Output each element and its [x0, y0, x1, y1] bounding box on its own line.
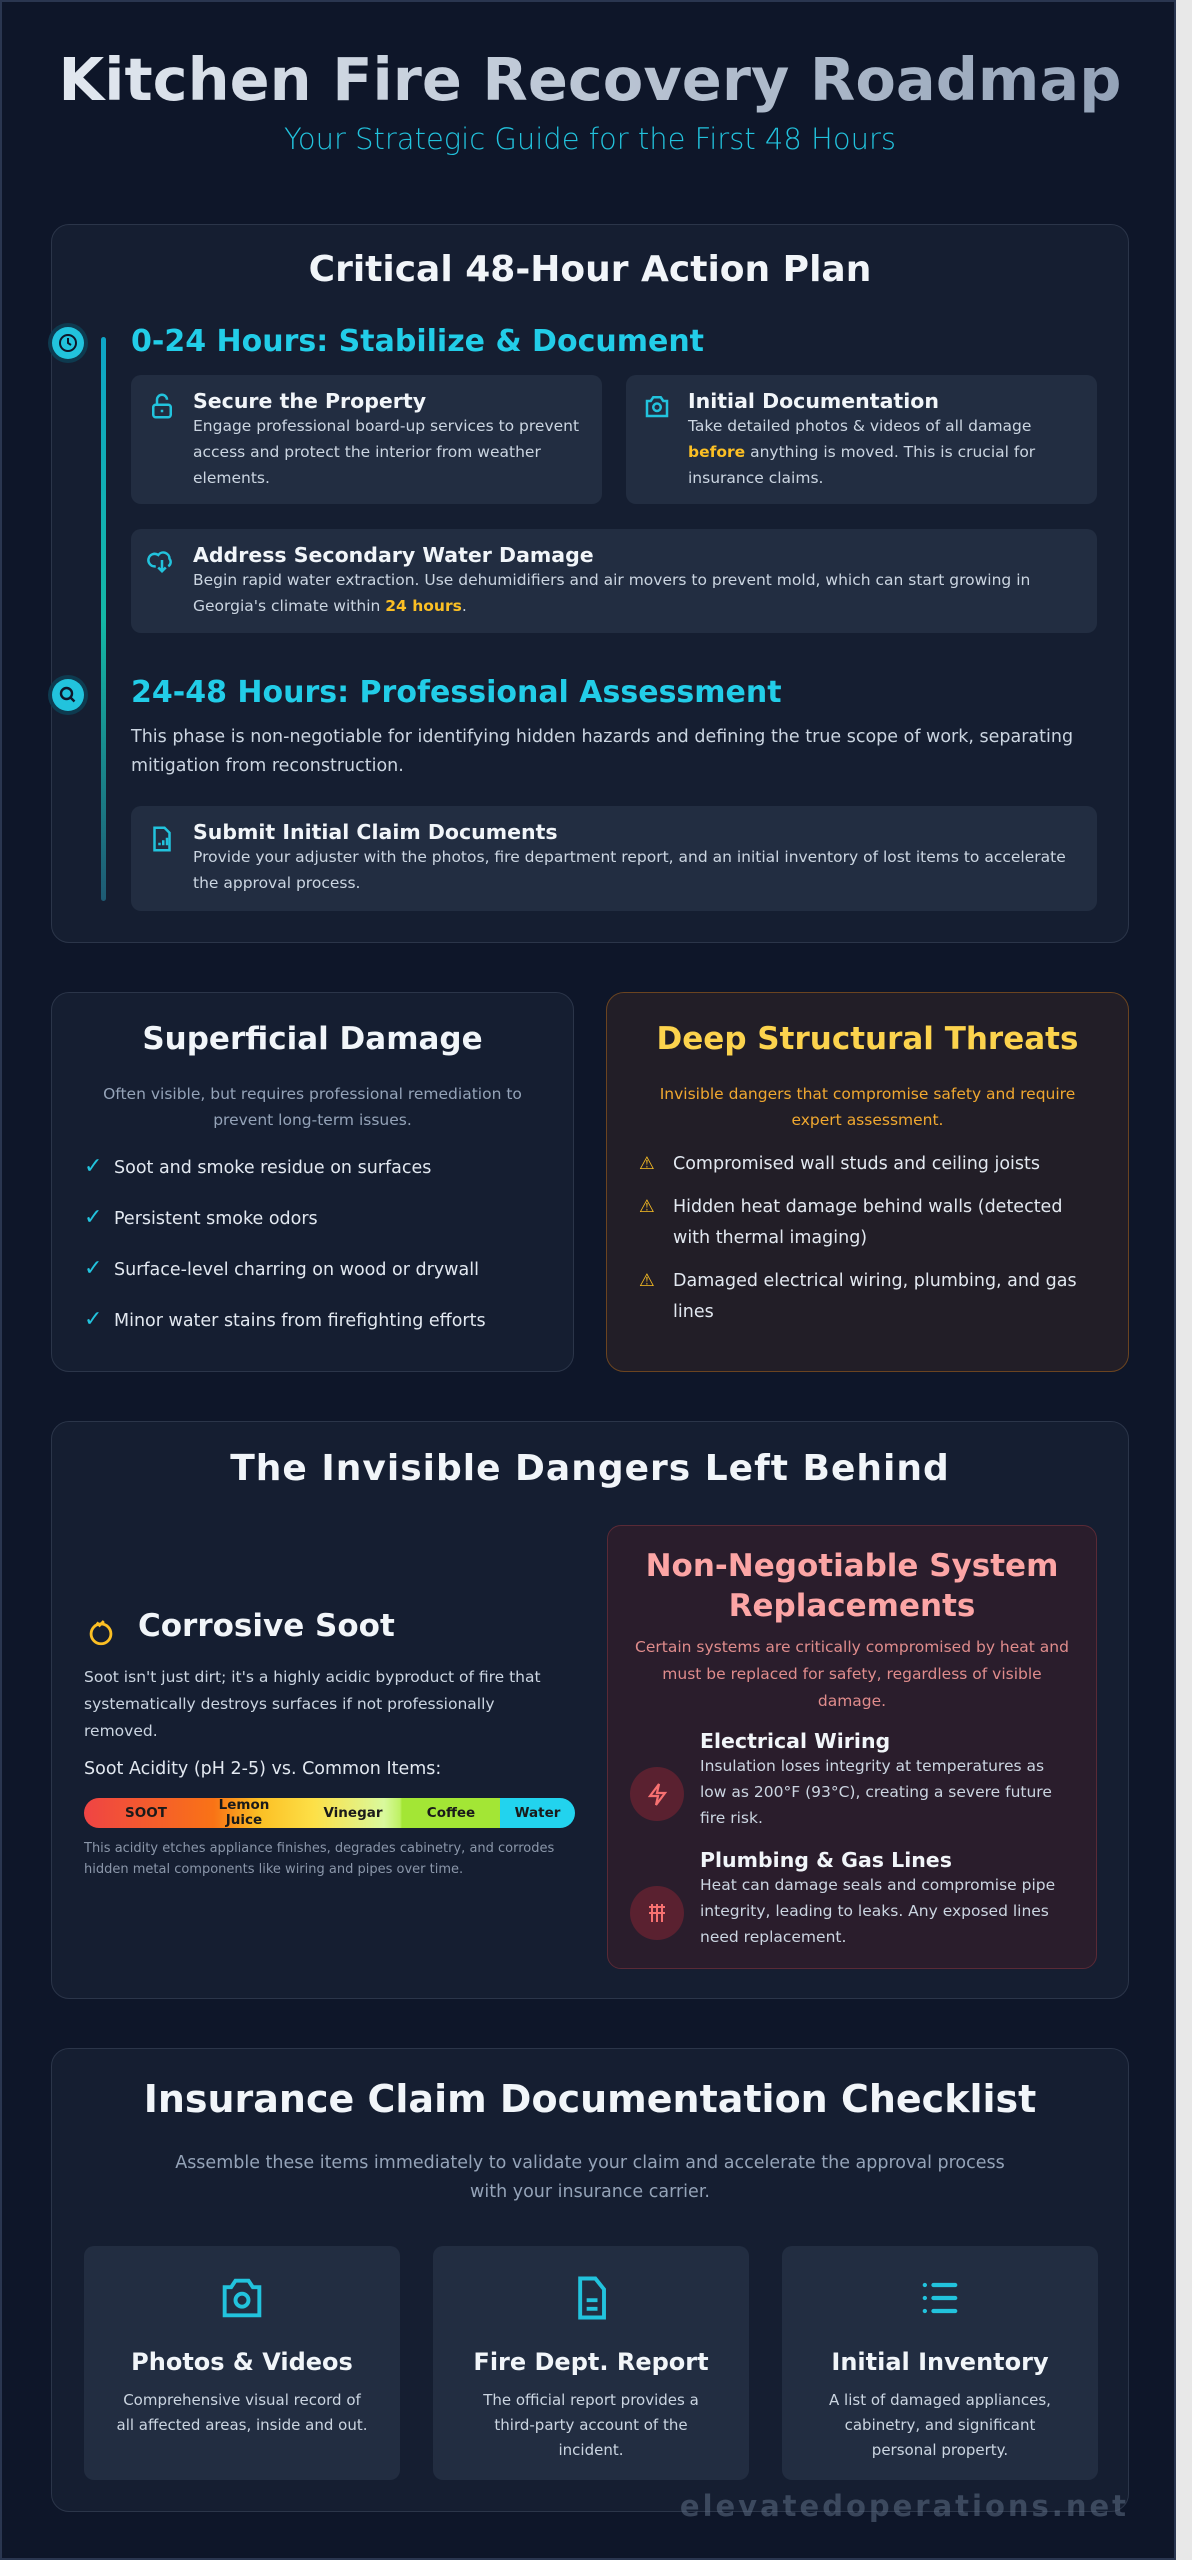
pH scale bar: SOOT	[125, 1805, 167, 1821]
card: fire report: The official report provides a third-party account of the incident.	[483, 2391, 699, 2459]
card: water damage	[131, 529, 1097, 633]
checklist	[84, 1154, 486, 1332]
icon: camera	[222, 2278, 262, 2318]
card: photos	[84, 2246, 400, 2480]
checklist: Persistent smoke odors	[114, 1209, 318, 1229]
heading: Deep Structural Threats	[657, 1021, 1078, 1057]
subtitle: Assemble these items immediately to validate your claim and accelerate the approval process with your insurance carrier.	[175, 2153, 1005, 2202]
panel: deep structural threats	[606, 992, 1129, 1372]
warning list: Compromised wall studs and ceiling joists	[673, 1154, 1040, 1174]
icon: camera	[646, 396, 668, 418]
checklist: ✓	[84, 1307, 102, 1332]
card: photos: Comprehensive visual record of all affected areas, inside and out.	[116, 2391, 368, 2434]
checklist: ✓	[84, 1154, 102, 1179]
checklist: Minor water stains from firefighting efforts	[114, 1311, 486, 1331]
card: fire report: Fire Dept. Report	[473, 2348, 709, 2376]
warning list: ⚠	[639, 1154, 655, 1174]
heading: Superficial Damage	[142, 1021, 483, 1057]
card: submit claim: Submit Initial Claim Documents	[193, 820, 558, 844]
subtitle: Certain systems are critically compromised by heat and must be replaced for safety, regardless of visible damage.	[635, 1638, 1069, 1710]
heading: Non-Negotiable System Replacements	[646, 1548, 1058, 1624]
card: photos: Photos & Videos	[131, 2348, 353, 2376]
subtitle: Invisible dangers that compromise safety and require expert assessment.	[660, 1085, 1075, 1129]
icon: lightning	[630, 1767, 684, 1821]
card: secure property	[131, 375, 602, 504]
panel: invisible dangers	[51, 1421, 1129, 1999]
checklist: ✓	[84, 1256, 102, 1281]
card: water damage: Address Secondary Water Damage	[193, 543, 594, 567]
icon: document	[578, 2276, 606, 2320]
warning list	[639, 1154, 1077, 1322]
pH scale bar: Juice	[226, 1812, 262, 1828]
card: secure property: Engage professional board-up services to prevent access and protect the interior from weather elements.	[193, 417, 579, 487]
pH scale bar	[84, 1798, 575, 1828]
pH scale bar: Vinegar	[323, 1805, 383, 1821]
item: plumbing: Heat can damage seals and compromise pipe integrity, leading to leaks. Any exposed lines need replacement.	[700, 1876, 1055, 1946]
icon: search	[52, 679, 84, 711]
chart note: This acidity etches appliance finishes, degrades cabinetry, and corrodes hidden metal components like wiring and pipes over time.	[84, 1841, 554, 1877]
checklist: Soot and smoke residue on surfaces	[114, 1158, 431, 1178]
subtitle: Your Strategic Guide for the First 48 Hours	[284, 122, 896, 156]
card: initial documentation: Take detailed photos & videos of all damage before anything is moved. This is crucial for insurance claims.	[688, 417, 1035, 487]
card: water damage: Begin rapid water extraction. Use dehumidifiers and air movers to prevent mold, which can start growing in Georgia's climate within 24 hours.	[193, 571, 1030, 615]
item: plumbing	[630, 1848, 1055, 1946]
icon: list	[922, 2282, 958, 2314]
card: secure property: Secure the Property	[193, 389, 426, 413]
heading: The Invisible Dangers Left Behind	[230, 1448, 950, 1489]
warning list: Hidden heat damage behind walls (detected with thermal imaging)	[673, 1197, 1062, 1248]
pH scale bar: Coffee	[427, 1805, 475, 1821]
soot heading: Corrosive Soot	[138, 1608, 395, 1644]
timeline line	[101, 337, 106, 901]
panel: system replacements	[607, 1525, 1097, 1969]
item: electrical: Insulation loses integrity at temperatures as low as 200°F (93°C), creating a severe future fire risk.	[700, 1757, 1052, 1827]
card: initial documentation: Initial Documentation	[688, 389, 939, 413]
subtitle: Often visible, but requires professional remediation to prevent long-term issues.	[103, 1085, 522, 1129]
panel: action plan	[51, 224, 1129, 943]
item: plumbing: Plumbing & Gas Lines	[700, 1848, 952, 1872]
item: electrical	[630, 1729, 1052, 1827]
icon: document chart	[153, 826, 171, 852]
heading: Insurance Claim Documentation Checklist	[144, 2077, 1036, 2121]
warning list: Damaged electrical wiring, plumbing, and gas lines	[673, 1271, 1077, 1322]
soot text: Soot isn't just dirt; it's a highly acidic byproduct of fire that systematically destroys surfaces if not professionally removed.	[84, 1668, 541, 1740]
panel: superficial damage	[51, 992, 574, 1372]
chart label: Soot Acidity (pH 2-5) vs. Common Items:	[84, 1759, 441, 1779]
panel heading: Critical 48-Hour Action Plan	[309, 249, 871, 290]
checklist: ✓	[84, 1205, 102, 1230]
card: inventory	[782, 2246, 1098, 2480]
card: submit claim	[131, 806, 1097, 911]
icon: soot	[90, 1620, 112, 1646]
card: fire report	[433, 2246, 749, 2480]
card: inventory: Initial Inventory	[831, 2348, 1049, 2376]
phase 1 heading: 0-24 Hours: Stabilize & Document	[131, 324, 704, 359]
phase 2 paragraph: This phase is non-negotiable for identifying hidden hazards and defining the true scope of work, separating mitigation from reconstruction.	[131, 727, 1073, 776]
panel: insurance checklist	[51, 2048, 1129, 2512]
card: submit claim: Provide your adjuster with the photos, fire department report, and an initial inventory of lost items to accelerate the approval process.	[193, 848, 1066, 892]
phase 2 heading: 24-48 Hours: Professional Assessment	[131, 675, 782, 710]
icon: clock	[52, 327, 84, 359]
icon: pipes	[630, 1886, 684, 1940]
checklist: Surface-level charring on wood or drywall	[114, 1260, 479, 1280]
card: inventory: A list of damaged appliances, cabinetry, and significant personal property.	[829, 2391, 1051, 2459]
icon: cloud download	[147, 551, 172, 573]
warning list: ⚠	[639, 1197, 655, 1217]
corrosive soot block	[84, 1608, 575, 1877]
warning list: ⚠	[639, 1271, 655, 1291]
watermark: elevatedoperations.net	[680, 2489, 1129, 2523]
card: initial documentation	[626, 375, 1097, 504]
title: Kitchen Fire Recovery Roadmap	[59, 45, 1121, 114]
icon: lock	[152, 394, 172, 418]
pH scale bar: Water	[515, 1805, 560, 1821]
item: electrical: Electrical Wiring	[700, 1729, 890, 1753]
